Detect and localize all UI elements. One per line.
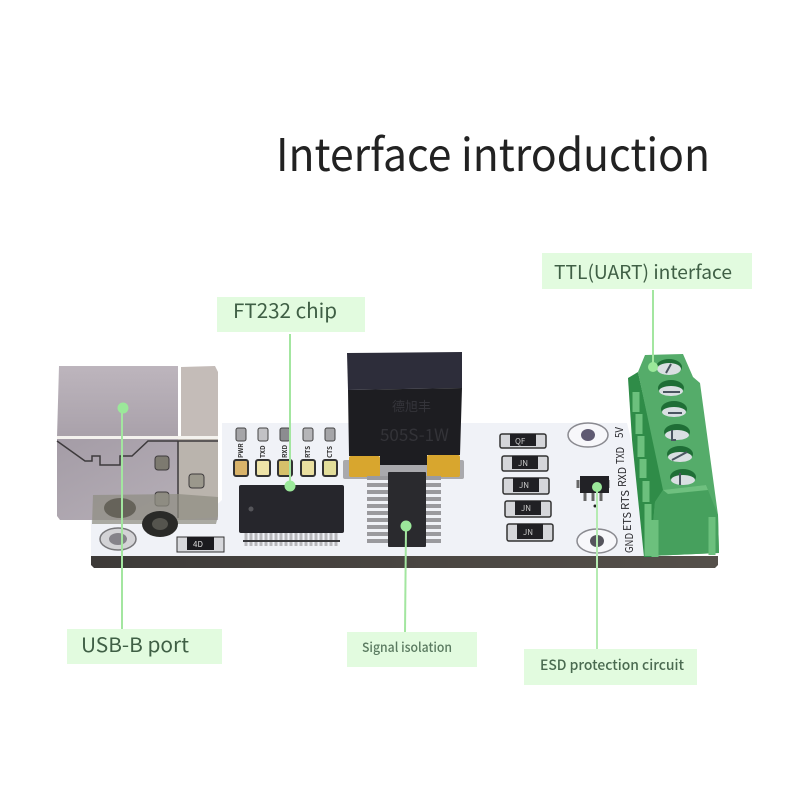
callout: TTL(UART) interface [542, 253, 752, 372]
pin silkscreen labels: 5V [611, 426, 627, 438]
callout: TTL(UART) interface: TTL(UART) interface [554, 258, 732, 285]
callout: ESD protection circuit: ESD protection circuit [540, 655, 684, 675]
status LEDs: RXD [279, 445, 289, 458]
pin silkscreen labels: GND [621, 533, 637, 553]
callout: FT232 chip [217, 295, 365, 492]
status LEDs: PWR [235, 443, 245, 458]
ESD chip [578, 476, 609, 508]
SMD resistors column [500, 434, 553, 541]
callout: FT232 chip: FT232 chip [233, 295, 337, 324]
mounting hole: bottom right [577, 529, 617, 553]
status LEDs: TXD [257, 445, 267, 458]
power module 505S: 德旭丰 [392, 396, 431, 415]
mounting hole: top right [568, 423, 608, 447]
status LEDs [234, 428, 337, 476]
title: Interface introduction [276, 119, 710, 184]
SMD resistors column: JN [523, 527, 533, 538]
small resistor 4D [177, 537, 224, 552]
power module 505S [343, 352, 464, 479]
SMD resistors column: QF [515, 436, 526, 447]
USB-B connector [57, 366, 218, 537]
pin silkscreen labels: RXD [614, 467, 630, 487]
USB mounting shield [92, 494, 218, 537]
small resistor 4D: 4D [193, 539, 203, 550]
SMD resistors column: JN [521, 503, 531, 514]
pin silkscreen labels: TXD [612, 447, 628, 464]
terminal block [628, 354, 719, 557]
pin silkscreen labels: RTS [617, 490, 633, 510]
SMD resistors column: JN [519, 480, 529, 491]
circuit board [91, 352, 718, 568]
power module 505S: 505S-1W [380, 421, 449, 446]
mounting hole: bottom left [100, 528, 136, 550]
callout: Signal isolation [347, 520, 477, 667]
FT232 chip [239, 485, 344, 546]
pin silkscreen labels [611, 426, 637, 553]
callout: USB-B port: USB-B port [81, 629, 189, 658]
pin silkscreen labels: ETS [619, 512, 635, 531]
status LEDs: RTS [302, 446, 312, 458]
callout: USB-B port [67, 402, 222, 664]
callout: ESD protection circuit [524, 482, 697, 685]
status LEDs: CTS [324, 446, 334, 458]
signal isolation chip [367, 472, 441, 547]
SMD resistors column: JN [518, 458, 528, 469]
callout: Signal isolation: Signal isolation [362, 637, 452, 656]
capacitor pads [349, 455, 460, 477]
terminal screws [656, 359, 696, 485]
